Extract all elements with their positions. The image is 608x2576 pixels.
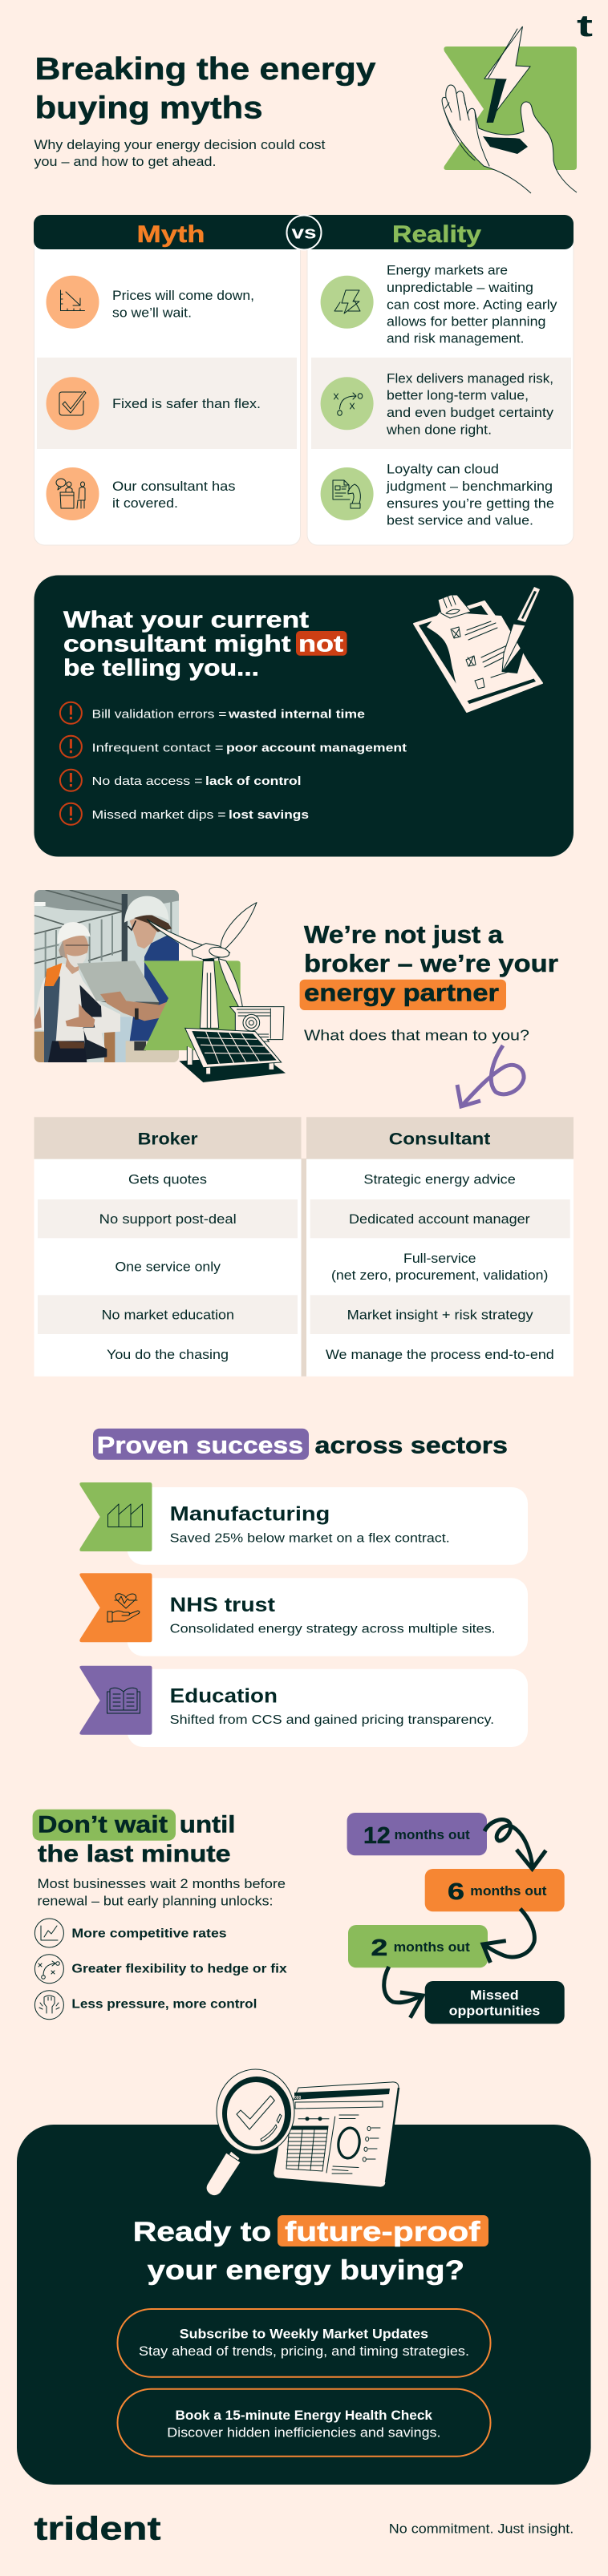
reality row 1: Energy markets are (387, 264, 508, 278)
consultant column text: Dedicated account manager (349, 1212, 530, 1227)
reality row 2: and even budget certainty (387, 406, 554, 420)
reality row 2 (321, 371, 554, 437)
warning 2: Infrequent contact = (91, 741, 224, 755)
warning 4 (60, 803, 309, 825)
header: broker (34, 1117, 302, 1159)
collage: photo, turbine, air conditioner, solar panel (34, 890, 286, 1082)
vs badge (287, 215, 321, 250)
panel: what your consultant might not be telling you (34, 576, 574, 856)
broker column text (99, 1173, 237, 1362)
highlighted row myth (37, 358, 297, 449)
heading: Proven success (97, 1432, 303, 1458)
reality row 3: best service and value. (387, 514, 533, 528)
broker column text: No support post-deal (99, 1212, 237, 1227)
icon: open book (107, 1688, 140, 1713)
broker column text: Gets quotes (128, 1173, 207, 1187)
myth row 3 (47, 467, 236, 520)
subtitle (34, 137, 326, 169)
button: energy health check: Book a 15-minute Energy Health Check (175, 2408, 433, 2423)
warning 2 (60, 736, 407, 758)
heading: myth: Myth (136, 221, 205, 248)
heading: the last minute (38, 1841, 231, 1867)
header: broker: Broker (138, 1130, 198, 1149)
title: Breaking the energy (35, 52, 376, 87)
icon: falling chart (61, 290, 85, 311)
myth row 3: Our consultant has (112, 479, 236, 494)
warning 1: Bill validation errors = (91, 708, 227, 722)
icon: factory (107, 1504, 143, 1527)
warning 1: wasted internal time (228, 708, 365, 722)
title (35, 52, 376, 125)
heading: across sectors (314, 1432, 508, 1458)
subtitle: Why delaying your energy decision could cost (34, 137, 326, 152)
myth row 1: Prices will come down, (112, 289, 254, 303)
illustration: solar panel (179, 1028, 286, 1082)
warning 3 (60, 770, 302, 791)
broker column text: No market education (102, 1308, 234, 1323)
button: energy health check (117, 2389, 491, 2457)
heading: your energy buying? (148, 2255, 464, 2286)
reality row 1: and risk management. (387, 332, 525, 346)
button: energy health check: Discover hidden inefficiencies and savings. (167, 2425, 441, 2440)
card: NHS trust: NHS trust (170, 1594, 276, 1616)
step: 6 months out: 6 (448, 1879, 464, 1905)
heading: reality: Reality (392, 221, 481, 248)
heading (300, 920, 558, 1010)
subtitle: you – and how to get ahead. (34, 154, 217, 169)
card: education (79, 1666, 528, 1747)
header section (34, 10, 594, 193)
myth row 2: Fixed is safer than flex. (112, 397, 261, 411)
icon: bolt and triangle (334, 290, 360, 313)
reality row 2: when done right. (386, 423, 492, 437)
warning 3: No data access = (91, 774, 203, 788)
step: missed opportunities: Missed (470, 1988, 519, 2003)
heading: Don’t wait (38, 1812, 168, 1838)
card: education: Shifted from CCS and gained pricing transparency. (170, 1713, 494, 1727)
consultant column text: We manage the process end-to-end (326, 1348, 554, 1362)
icon: document and chess knight (333, 480, 360, 508)
benefit: competitive rates (34, 1919, 227, 1947)
step: 2 months out: 2 (371, 1935, 387, 1961)
warning 4: lost savings (229, 808, 309, 822)
step: 12 months out: months out (395, 1827, 470, 1842)
heading: until (180, 1812, 235, 1838)
reality row 3: judgment – benchmarking (386, 479, 553, 494)
step: 2 months out (348, 1925, 488, 1967)
body text (37, 1877, 286, 1908)
consultant column text (326, 1173, 554, 1362)
illustration: air conditioning unit (230, 1007, 284, 1041)
reality row 1 (321, 264, 557, 346)
card: NHS trust (79, 1573, 528, 1656)
illustration: clipboard and pen (414, 587, 542, 712)
button: weekly market updates: Stay ahead of trends, pricing, and timing strategies. (139, 2344, 469, 2359)
illustration: magnifying glass with check (206, 2069, 294, 2196)
benefit: less pressure: Less pressure, more control (71, 1998, 257, 2012)
step: 12 months out (347, 1813, 487, 1855)
reality row 3 (321, 463, 554, 528)
left man (34, 964, 120, 1057)
consultant column text: Full-service (403, 1252, 476, 1266)
body text: renewal – but early planning unlocks: (37, 1894, 273, 1908)
step: 2 months out: months out (394, 1939, 470, 1955)
card: manufacturing (79, 1482, 528, 1565)
section: energy partner (34, 890, 558, 1106)
heading: be telling you... (63, 656, 259, 681)
step: 6 months out: months out (470, 1883, 547, 1899)
header: consultant (306, 1117, 574, 1159)
warning 3: lack of control (205, 774, 302, 788)
illustration: lightning bolt in hand (442, 26, 577, 193)
heading (63, 607, 347, 681)
tagline: No commitment. Just insight. (389, 2521, 574, 2536)
subheading: What does that mean to you? (304, 1028, 529, 1044)
myth row 1 (47, 276, 254, 329)
heading: Ready to (133, 2217, 271, 2247)
body text: Most businesses wait 2 months before (37, 1877, 286, 1891)
vs badge: vs (292, 223, 316, 242)
reality row 1: can cost more. Acting early (387, 297, 557, 312)
illustration: wind turbine (147, 903, 257, 1028)
heading (33, 1810, 235, 1867)
step: 6 months out (425, 1869, 565, 1911)
table background (34, 1159, 574, 1377)
icon: strategy play (334, 393, 356, 409)
reality row 1: allows for better planning (387, 314, 545, 329)
list: warnings (60, 702, 407, 825)
footer (34, 2509, 574, 2546)
reality row 1: unpredictable – waiting (387, 281, 533, 295)
flow: timeline (347, 1813, 565, 2024)
row shading (38, 1199, 570, 1334)
arrow: 2 months to missed opportunities (384, 1967, 423, 2018)
panel: call to action (17, 2069, 591, 2485)
benefit: less pressure (34, 1991, 257, 2020)
reality row 3: Loyalty can cloud (387, 463, 499, 477)
logo: trident: trident (34, 2509, 161, 2546)
logo mark: t (577, 10, 594, 43)
warning 1 (60, 702, 365, 724)
myth column card (34, 233, 300, 545)
broker column text: One service only (116, 1260, 221, 1275)
myth row 2 (47, 377, 261, 430)
card: manufacturing: Manufacturing (170, 1503, 330, 1526)
heading: What your current (63, 607, 309, 633)
photo: two engineers with laptop (34, 890, 179, 1062)
icon: checked box (59, 391, 86, 415)
green backdrop (144, 960, 241, 1050)
header bar (34, 215, 574, 249)
card: NHS trust: Consolidated energy strategy across multiple sites. (170, 1623, 496, 1636)
heading: consultant might (63, 631, 291, 657)
warning 2: poor account management (226, 741, 407, 755)
myth row 3: it covered. (112, 496, 178, 511)
consultant column text: Strategic energy advice (363, 1173, 516, 1187)
consultant column text: (net zero, procurement, validation) (331, 1268, 548, 1283)
card: manufacturing: Saved 25% below market on a flex contract. (170, 1531, 450, 1545)
highlighted row reality (311, 358, 571, 449)
benefit: competitive rates: More competitive rates (71, 1927, 227, 1941)
broker column text: You do the chasing (107, 1348, 229, 1362)
arrow: 6 to 2 months (483, 1909, 534, 1963)
right man (130, 936, 179, 1052)
step: missed opportunities (425, 1981, 565, 2024)
reality row 3: ensures you’re getting the (387, 496, 554, 511)
reality row 2: better long-term value, (387, 389, 529, 403)
card: education: Education (170, 1684, 278, 1707)
laptop and arm (77, 960, 159, 1002)
consultant column text: Market insight + risk strategy (347, 1308, 533, 1323)
icon: heart in hand (107, 1594, 140, 1622)
heading: energy partner (304, 978, 499, 1006)
arrow: 12 to 6 months (484, 1820, 545, 1869)
title: buying myths (35, 91, 263, 125)
warning 4: Missed market dips = (91, 808, 226, 822)
header: consultant: Consultant (389, 1130, 490, 1149)
myth row 1: so we’ll wait. (112, 306, 192, 321)
button: weekly market updates (117, 2309, 491, 2377)
heading: future-proof (285, 2217, 480, 2247)
step: missed opportunities: opportunities (449, 2004, 540, 2018)
reality column card (307, 233, 574, 545)
heading (133, 2215, 488, 2286)
heading: We’re not just a (304, 920, 504, 948)
button: weekly market updates: Subscribe to Weekly Market Updates (180, 2327, 428, 2341)
section: proven success (79, 1429, 528, 1747)
illustration: tablet dashboard: 000 (294, 2096, 302, 2101)
heading: not (298, 631, 343, 657)
heading (93, 1429, 508, 1460)
reality row 2: Flex delivers managed risk, (387, 371, 553, 386)
arrow: curly purple (457, 1045, 524, 1106)
illustration: tablet dashboard (274, 2082, 399, 2187)
section: don't wait until the last minute (33, 1810, 565, 2024)
table: broker vs consultant (34, 1117, 574, 1377)
benefit: flexibility (34, 1955, 287, 1984)
benefit: flexibility: Greater flexibility to hedge or fix (71, 1963, 287, 1976)
step: 12 months out: 12 (363, 1823, 391, 1849)
heading: broker – we’re your (304, 949, 558, 977)
icon: consultant at desk (56, 479, 85, 508)
panel: myth vs reality (34, 215, 574, 545)
